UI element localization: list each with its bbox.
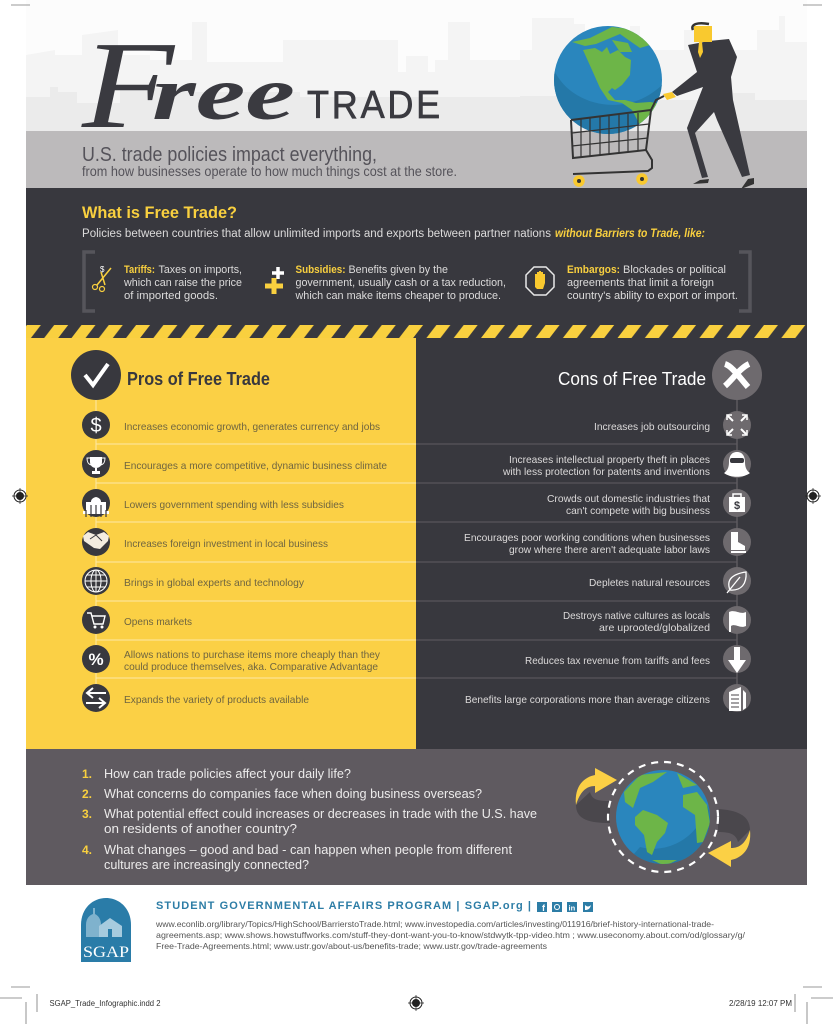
icon: briefcase with dollar: $ <box>734 500 740 512</box>
subsidies text <box>295 264 506 302</box>
heading: cons: Cons of Free Trade <box>558 369 706 389</box>
small globe <box>616 770 710 864</box>
pro 7: Allows nations to purchase items more cheaply than they <box>124 649 381 661</box>
panel: cons <box>416 338 807 749</box>
tariffs text <box>123 264 242 302</box>
references <box>155 919 746 951</box>
con 3: can't compete with big business <box>566 505 710 517</box>
references: agreements.asp; www.shows.howstuffworks.com/stuff-they-dont-want-you-to-know/stdwytk-tpp-video.htm ; www.useconomy.about.com/od/glossary/g/ <box>156 930 746 940</box>
icon: masked thief <box>723 450 751 478</box>
con 6: are uprooted/globalized <box>599 622 710 634</box>
con 5: Depletes natural resources <box>589 577 710 589</box>
logo: SGAP <box>81 898 131 962</box>
subtitle: U.S. trade policies impact everything, <box>82 144 377 166</box>
question 3 <box>82 807 537 836</box>
icon: boot <box>723 528 751 556</box>
con 7: Reduces tax revenue from tariffs and fees <box>525 655 710 667</box>
question 1: How can trade policies affect your daily life? <box>104 767 351 781</box>
embargos text: Blockades or political <box>623 264 726 276</box>
panel: discussion questions <box>26 749 807 885</box>
icon: briefcase with dollar <box>723 489 751 517</box>
question 4 <box>82 843 513 872</box>
icon: globe with circling arrows <box>576 762 750 872</box>
icon: trophy <box>82 450 110 478</box>
icon: scissors: $ <box>100 265 105 274</box>
icon: scissors <box>92 265 111 292</box>
pro 3: Lowers government spending with less subsidies <box>124 499 344 511</box>
illustration: globe in shopping cart pushed by businessman <box>554 23 754 189</box>
embargos text: agreements that limit a foreign <box>567 277 714 289</box>
bracket right <box>739 252 750 311</box>
footer <box>81 898 746 962</box>
yellow arrow top <box>576 768 617 805</box>
icon: exchange arrows <box>82 684 110 712</box>
heading: pros: Pros of Free Trade <box>127 369 270 389</box>
con 4: Encourages poor working conditions when businesses <box>464 532 710 544</box>
question 3: on residents of another country? <box>104 822 297 836</box>
icon: stop hand <box>526 267 554 295</box>
question 4: cultures are increasingly connected? <box>104 858 309 872</box>
logo: SGAP: SGAP <box>83 944 129 961</box>
pro 7: could produce themselves, aka. Comparative Advantage <box>124 661 378 673</box>
businessman <box>663 23 754 189</box>
shopping cart <box>571 96 664 186</box>
yellow arrow bottom <box>708 830 750 867</box>
hazard stripes <box>26 325 807 338</box>
icon: globe grid <box>82 567 110 595</box>
con 6: Destroys native cultures as locals <box>563 610 710 622</box>
tariffs text: Tariffs: <box>124 264 155 276</box>
question 4: What changes – good and bad - can happen when people from different <box>104 843 513 857</box>
icon: handshake <box>82 528 110 556</box>
question 3: What potential effect could increases or decreases in trade with the U.S. have <box>104 807 537 821</box>
subsidies text: Benefits given by the <box>348 264 448 276</box>
printer slug <box>50 999 792 1008</box>
question 1: 1. <box>82 767 92 781</box>
gray arrow bands <box>576 792 750 842</box>
subsidies text: government, usually cash or a tax reduction, <box>296 277 506 289</box>
con 8: Benefits large corporations more than average citizens <box>465 694 710 706</box>
pro 6: Opens markets <box>124 616 192 628</box>
icon: x mark <box>712 350 762 400</box>
printer slug: 2/28/19 12:07 PM <box>729 999 792 1008</box>
globe <box>554 26 662 140</box>
con 2 <box>502 454 710 478</box>
icon: capitol building <box>82 489 110 517</box>
pro 4: Increases foreign investment in local business <box>124 538 328 550</box>
social icons <box>537 902 593 913</box>
pro 7 <box>124 649 381 673</box>
icon: percent <box>82 645 110 673</box>
printer slug: SGAP_Trade_Infographic.indd 2 <box>50 999 161 1008</box>
subsidies text: which can make items cheaper to produce. <box>295 290 501 302</box>
references: Free-Trade-Agreements.html; www.ustr.gov/about-us/benefits-trade; www.ustr.gov/trade-agreements <box>156 941 547 951</box>
embargos text: Embargos: <box>567 264 620 276</box>
icon: leaf <box>723 567 751 595</box>
title <box>81 17 443 155</box>
icon: dollar: $ <box>90 415 102 437</box>
social icons: in <box>568 904 576 912</box>
definition text: Policies between countries that allow unlimited imports and exports between partner nations <box>82 228 551 240</box>
dashed ring <box>608 762 718 872</box>
title: F <box>81 17 176 155</box>
question 3: 3. <box>82 807 92 821</box>
question 4: 4. <box>82 843 92 857</box>
subsidies text: Subsidies: <box>296 264 346 276</box>
con 2: with less protection for patents and inventions <box>502 466 710 478</box>
con 4 <box>464 532 710 556</box>
tariffs text: which can raise the price <box>123 277 242 289</box>
social icons: f <box>542 903 546 913</box>
title: TRADE <box>307 84 443 127</box>
references: www.econlib.org/library/Topics/HighSchool/BarrierstoTrade.html; www.investopedia.com/articles/investing/011916/brief-history-international-trade- <box>155 919 714 929</box>
definition text: without Barriers to Trade, like: <box>555 228 705 240</box>
question 2: What concerns do companies face when doing business overseas? <box>104 787 482 801</box>
tariffs text: Taxes on imports, <box>158 264 242 276</box>
icon: outward arrows <box>723 411 751 439</box>
con 2: Increases intellectual property theft in places <box>509 454 710 466</box>
subtitle: from how businesses operate to how much things cost at the store. <box>82 163 457 179</box>
registration mark left <box>12 488 28 504</box>
icon: plus signs <box>265 267 284 294</box>
panel: pros <box>26 338 416 749</box>
pro 1: Increases economic growth, generates currency and jobs <box>124 421 380 433</box>
icon: office buildings <box>723 684 751 712</box>
title: ree <box>152 52 295 136</box>
subtitle <box>82 144 457 179</box>
con 3 <box>547 493 710 517</box>
icon: percent: % <box>88 650 104 669</box>
pro 8: Expands the variety of products available <box>124 694 309 706</box>
program heading: STUDENT GOVERNMENTAL AFFAIRS PROGRAM | SGAP.org | <box>156 900 531 912</box>
icon: down arrow <box>723 645 751 673</box>
heading: what is free trade: What is Free Trade? <box>82 203 237 222</box>
tariffs text: of imported goods. <box>124 290 218 302</box>
con 1: Increases job outsourcing <box>594 421 710 433</box>
pro 2: Encourages a more competitive, dynamic business climate <box>124 460 387 472</box>
embargos text <box>567 264 738 302</box>
panel: what is free trade <box>26 188 807 338</box>
bracket left <box>84 252 95 311</box>
con 3: Crowds out domestic industries that <box>547 493 710 505</box>
question 2: 2. <box>82 787 92 801</box>
icon: check mark <box>71 350 121 400</box>
icon: dollar <box>82 411 110 439</box>
pro 5: Brings in global experts and technology <box>124 577 305 589</box>
con 4: grow where there aren't adequate labor laws <box>509 544 710 556</box>
icon: cart <box>82 606 110 634</box>
registration mark bottom <box>408 995 424 1011</box>
embargos text: country's ability to export or import. <box>567 290 738 302</box>
header panel <box>26 0 807 189</box>
icon: flag <box>723 606 751 634</box>
con 6 <box>563 610 710 634</box>
registration mark right <box>805 488 821 504</box>
skyline background <box>26 16 807 131</box>
